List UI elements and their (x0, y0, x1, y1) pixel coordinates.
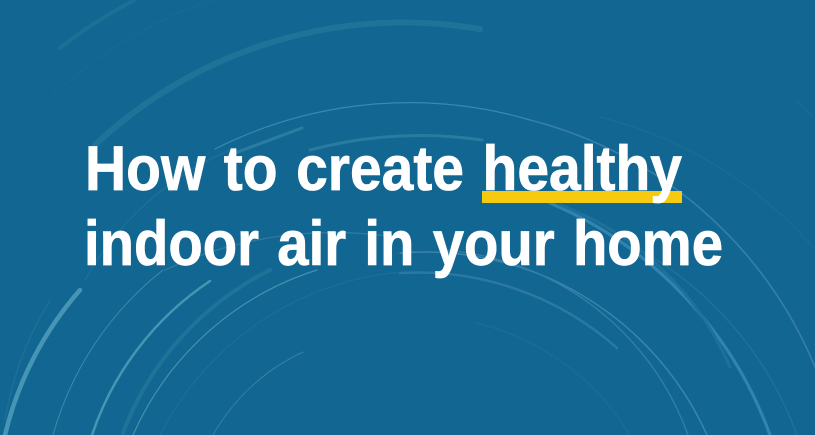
title (84, 134, 723, 279)
title line 2: indoor air in your home (84, 209, 723, 279)
title line 1: How to create healthy (85, 134, 682, 204)
highlight underline (482, 191, 682, 203)
